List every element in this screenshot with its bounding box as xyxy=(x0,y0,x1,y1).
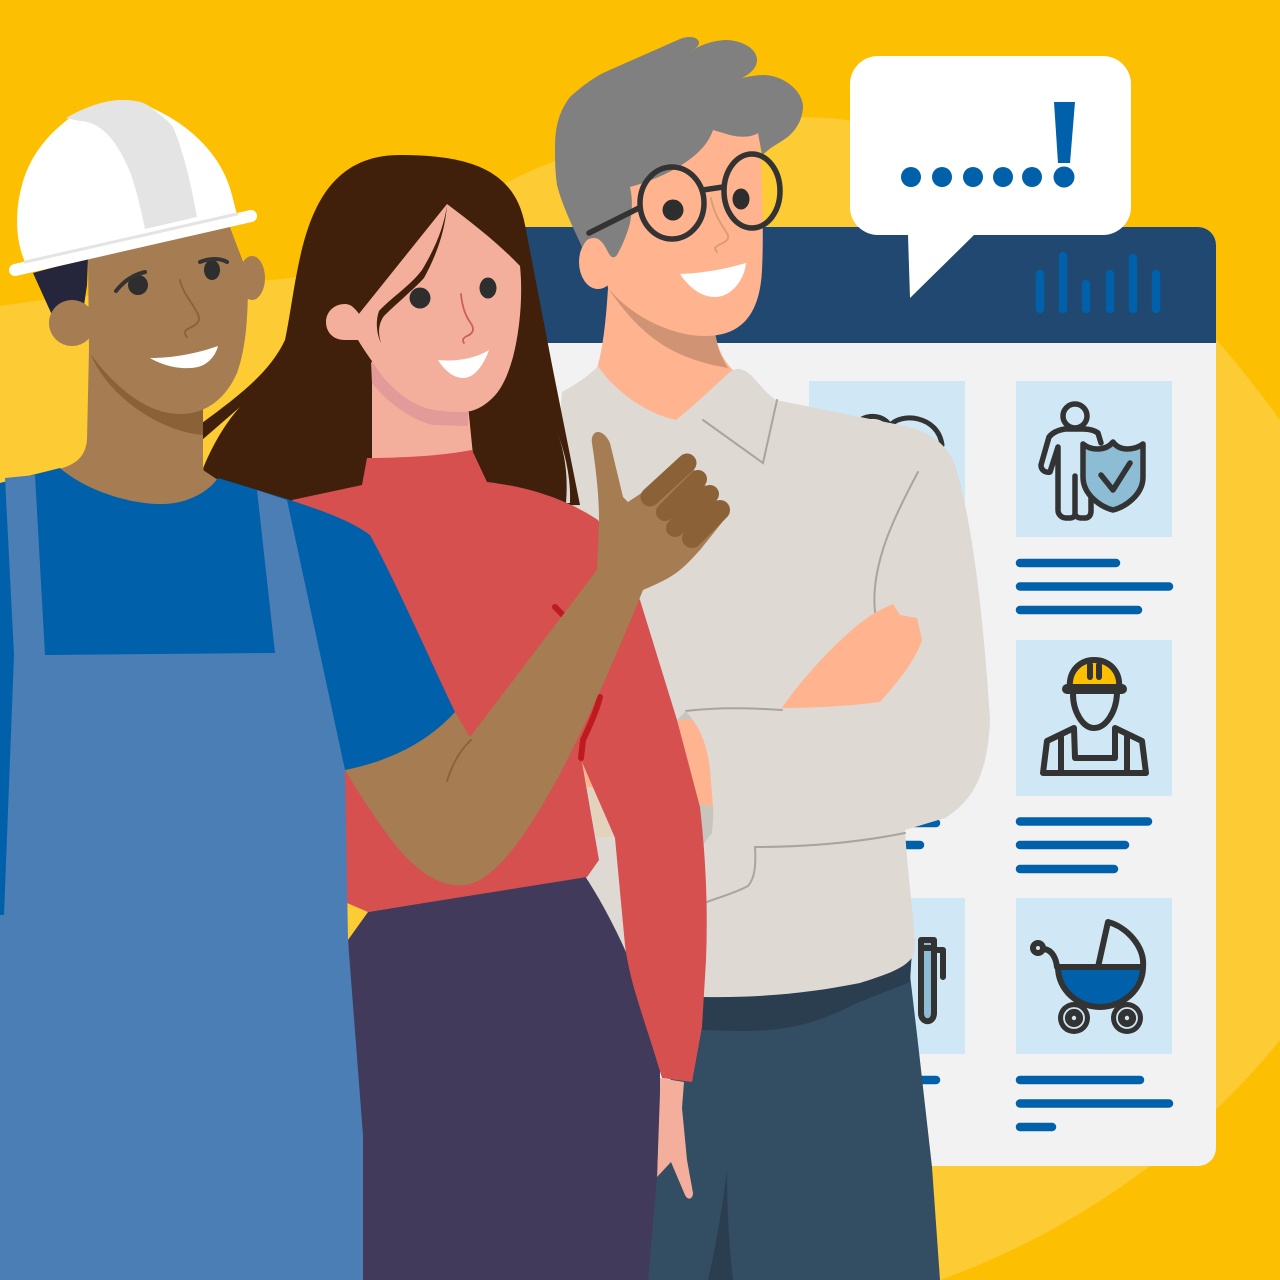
man: glasses xyxy=(589,154,780,239)
man: collar and sleeve fold lines xyxy=(686,400,918,902)
worker: smile xyxy=(150,346,218,368)
icon: worker with helmet xyxy=(1043,660,1146,773)
worker: hat stripe xyxy=(66,100,197,229)
icon: pram xyxy=(1033,922,1143,1034)
woman: skirt xyxy=(348,876,660,1280)
man: neck shadow xyxy=(608,288,728,368)
worker: face xyxy=(88,222,248,414)
worker: ears xyxy=(49,256,265,346)
ellipsis and exclamation mark xyxy=(901,102,1075,188)
woman: gap skin xyxy=(582,762,595,787)
man: other hand xyxy=(677,719,713,807)
man: face xyxy=(600,120,763,336)
woman: eyes xyxy=(410,278,496,308)
worker: arm and hand xyxy=(345,432,728,885)
man: upper cuff xyxy=(677,711,692,720)
woman: gap between sleeve and body xyxy=(587,837,619,885)
worker: fingers xyxy=(650,463,721,540)
man: hair xyxy=(555,37,803,257)
worker: eyebrows xyxy=(116,259,227,291)
woman: face xyxy=(358,204,521,412)
header signal bars xyxy=(1040,256,1156,309)
icon: person with shield xyxy=(1041,404,1143,518)
worker: nose xyxy=(180,280,199,337)
woman: hand xyxy=(657,1078,693,1199)
woman xyxy=(202,155,707,1280)
man with glasses xyxy=(540,37,990,1280)
woman: ear xyxy=(326,304,360,340)
man: hand on arm xyxy=(782,604,922,708)
text placeholder lines xyxy=(880,563,1169,1127)
woman: neck shadow xyxy=(371,362,468,426)
man: neck xyxy=(596,288,735,428)
panel: document window xyxy=(500,227,1216,1166)
worker: eyes xyxy=(128,260,220,295)
man: smile xyxy=(680,263,746,297)
icon: pen xyxy=(921,940,943,1021)
woman: smile xyxy=(438,350,489,378)
man: ear xyxy=(579,235,617,289)
worker: neck xyxy=(0,350,225,512)
man: shirt xyxy=(540,366,990,1000)
worker: overalls xyxy=(0,475,363,1280)
man: nose xyxy=(711,198,728,252)
worker: neck shadow xyxy=(89,350,203,435)
woman: sweater shadow marks xyxy=(555,607,600,758)
man: trousers xyxy=(630,958,940,1280)
worker in hard hat xyxy=(0,100,728,1280)
woman: hair sliver xyxy=(557,432,570,503)
icon: partly hidden top-left tile xyxy=(855,416,942,445)
woman: gap tan shirt xyxy=(587,787,613,837)
woman: hair strand on face xyxy=(377,205,447,343)
woman: neck xyxy=(372,360,473,460)
worker: hat brim xyxy=(15,214,251,270)
worker: elbow crease xyxy=(447,740,471,781)
man: eyes xyxy=(662,188,750,220)
man: trouser crease xyxy=(708,1170,733,1280)
woman: nose xyxy=(461,294,473,343)
man: shirt shadow on trousers xyxy=(700,950,912,1031)
speech bubble xyxy=(850,56,1131,298)
tile backgrounds xyxy=(809,381,1172,1054)
man: lower cuff xyxy=(698,803,713,845)
woman: hair back xyxy=(202,155,580,510)
panel header xyxy=(500,227,1216,343)
woman: sweater xyxy=(292,450,707,1082)
worker: hair back xyxy=(33,226,243,315)
worker: blue shirt xyxy=(0,468,455,925)
worker: hard hat xyxy=(17,100,237,262)
